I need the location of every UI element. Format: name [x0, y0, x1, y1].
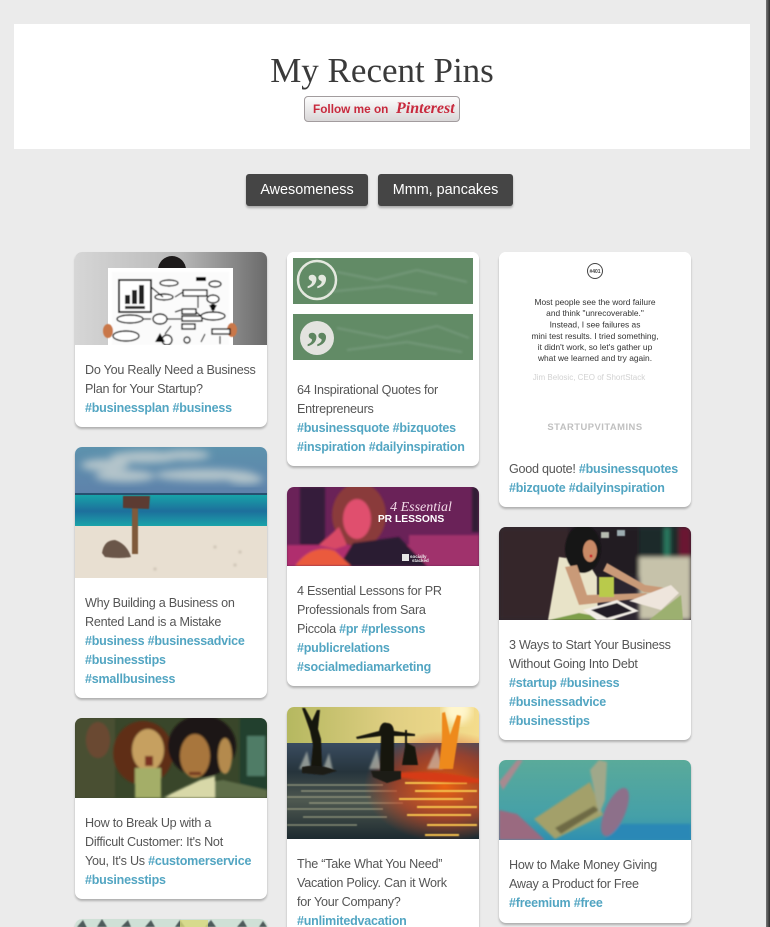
image: man holding business plan board — [75, 252, 267, 345]
text: description: Professionals from Sara — [297, 603, 426, 617]
follow me on Pinterest button: Follow me on — [313, 102, 388, 116]
text: description: #socialmediamarketing — [297, 660, 431, 674]
image: woman on phone, PR lessons — [287, 487, 479, 566]
text: description: for Your Company? — [297, 895, 401, 909]
image: quote poster: STARTUPVITAMINS — [547, 421, 643, 432]
text: description: Good quote! #businessquotes — [509, 462, 678, 476]
image: woman on phone, PR lessons: PR LESSONS — [378, 514, 444, 525]
button: Awesomeness: Awesomeness — [260, 182, 354, 198]
image: people splashing at sunset — [287, 707, 479, 839]
image: woman on phone, PR lessons: socially — [410, 554, 427, 559]
button: Mmm, pancakes: Mmm, pancakes — [393, 182, 498, 198]
image: two women reacting — [75, 718, 267, 798]
text: description: Plan for Your Startup? — [85, 382, 203, 396]
panel: header — [14, 24, 750, 149]
text: description: #freemium #free — [509, 896, 603, 910]
title: My Recent Pins — [270, 51, 494, 90]
image: woman on phone, PR lessons: stacked — [412, 558, 429, 563]
text: description — [85, 816, 251, 887]
text: description: Away a Product for Free — [509, 877, 639, 891]
text: description: 3 Ways to Start Your Business — [509, 638, 671, 652]
text: description: #smallbusiness — [85, 672, 175, 686]
image: green quote banners: ” — [306, 265, 328, 314]
window edge strip — [766, 0, 770, 927]
image: green quote banners — [293, 258, 473, 370]
image: quote poster: #401 — [589, 269, 601, 275]
card: startup vitamins quote — [499, 252, 691, 507]
text: description: #businessquote #bizquotes — [297, 421, 456, 435]
text: description: Why Building a Business on — [85, 596, 235, 610]
text: description: #businessplan #business — [85, 401, 232, 415]
text: description: #businesstips — [85, 653, 166, 667]
image: quote poster: and think "unrecoverable." — [546, 308, 644, 318]
text: description — [509, 858, 657, 910]
card: difficult customer — [75, 718, 267, 899]
image: beach with wooden sign — [75, 447, 267, 578]
image: quote poster: what we learned and try again. — [537, 353, 652, 363]
text: description: 4 Essential Lessons for PR — [297, 584, 442, 598]
button: Awesomeness — [246, 174, 368, 206]
card: beach — [75, 447, 267, 698]
card: vacation policy — [287, 707, 479, 927]
text: description: Entrepreneurs — [297, 402, 374, 416]
text: description: #businesstips — [509, 714, 590, 728]
image: quote poster — [531, 263, 659, 432]
text: description: Piccola #pr #prlessons — [297, 622, 425, 636]
text: description: You, It's Us #customerservice — [85, 854, 251, 868]
text: description — [297, 584, 442, 674]
text: description: Rented Land is a Mistake — [85, 615, 221, 629]
text: description: #publicrelations — [297, 641, 390, 655]
text: description — [297, 383, 465, 454]
image: woman writing at desk — [499, 527, 691, 620]
text: description: #businessadvice — [509, 695, 606, 709]
image: woman on phone, PR lessons: 4 Essential — [390, 500, 452, 515]
text: description: How to Make Money Giving — [509, 858, 657, 872]
image: quote poster: Most people see the word failure — [534, 297, 656, 307]
image: feet out of car window — [499, 760, 691, 840]
text: description — [297, 857, 447, 927]
card: PR lessons — [287, 487, 479, 686]
text: description: Vacation Policy. Can it Work — [297, 876, 447, 890]
text: description: #startup #business — [509, 676, 619, 690]
follow me on Pinterest button: Pinterest — [396, 100, 455, 117]
text: description: #inspiration #dailyinspiration — [297, 440, 465, 454]
card: partially visible pattern — [75, 919, 267, 927]
text: description — [85, 596, 245, 686]
text: description: The “Take What You Need” — [297, 857, 442, 871]
text: description: 64 Inspirational Quotes for — [297, 383, 438, 397]
image: quote poster: it didn't work, so let's gather up — [538, 342, 653, 352]
text: description: #businesstips — [85, 873, 166, 887]
text: description: #bizquote #dailyinspiration — [509, 481, 665, 495]
text: description — [509, 638, 671, 728]
image: quote poster: Jim Belosic, CEO of ShortStack — [533, 373, 646, 382]
follow me on Pinterest button — [304, 96, 460, 122]
image: quote poster: Instead, I see failures as — [550, 320, 640, 330]
text: description — [85, 363, 256, 415]
card: business plan — [75, 252, 267, 427]
text: description: #business #businessadvice — [85, 634, 245, 648]
card: start your business — [499, 527, 691, 740]
text: description — [509, 462, 678, 495]
text: description: Difficult Customer: It's Not — [85, 835, 223, 849]
image: triangle pattern — [75, 919, 267, 927]
text: description: How to Break Up with a — [85, 816, 211, 830]
image: quote poster: mini test results. I tried something, — [531, 331, 659, 341]
card: inspirational quotes — [287, 252, 479, 466]
text: description: Without Going Into Debt — [509, 657, 638, 671]
text: description: Do You Really Need a Business — [85, 363, 256, 377]
button: Mmm, pancakes — [378, 174, 513, 206]
card: giving away a product — [499, 760, 691, 923]
